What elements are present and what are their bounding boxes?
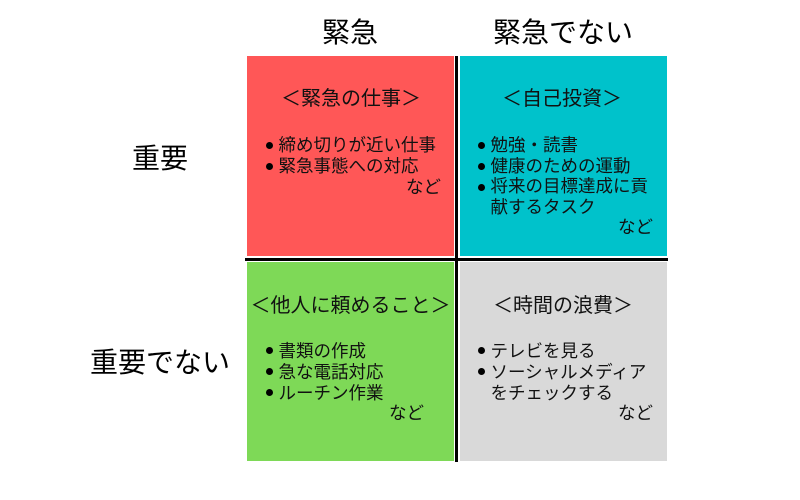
list: テレビを見る: [490, 341, 596, 361]
list: ソーシャルメディア: [490, 362, 646, 382]
panel title: ＜緊急の仕事＞: [281, 88, 421, 110]
panel title: ＜自己投資＞: [502, 88, 622, 110]
list: 勉強・読書: [490, 135, 578, 155]
list: 健康のための運動: [490, 156, 630, 176]
list: [266, 341, 424, 423]
list: をチェックする: [490, 383, 613, 403]
heading: urgent: 緊急: [322, 17, 378, 48]
panel title: ＜時間の浪費＞: [493, 295, 633, 317]
list: 緊急事態への対応: [278, 156, 418, 176]
list: 献するタスク: [490, 197, 596, 217]
list: 締め切りが近い仕事: [278, 135, 436, 155]
list: 書類の作成: [278, 341, 366, 361]
panel: delegate: [247, 262, 454, 461]
list: など: [406, 177, 441, 197]
list: [266, 135, 441, 197]
list: など: [389, 403, 424, 423]
list: ルーチン作業: [278, 383, 384, 403]
heading: not important: 重要でない: [90, 347, 230, 378]
list: 急な電話対応: [278, 362, 384, 382]
heading: important: 重要: [132, 143, 188, 174]
panel: self investment: [460, 56, 667, 256]
list: など: [618, 217, 653, 237]
heading: not urgent: 緊急でない: [493, 17, 633, 48]
panel: urgent work: [247, 56, 454, 256]
list: [478, 135, 653, 237]
list: など: [618, 403, 653, 423]
list: 将来の目標達成に貢: [490, 176, 648, 196]
list: [478, 341, 653, 423]
panel title: ＜他人に頼めること＞: [250, 295, 450, 317]
panel: waste of time: [460, 262, 667, 461]
